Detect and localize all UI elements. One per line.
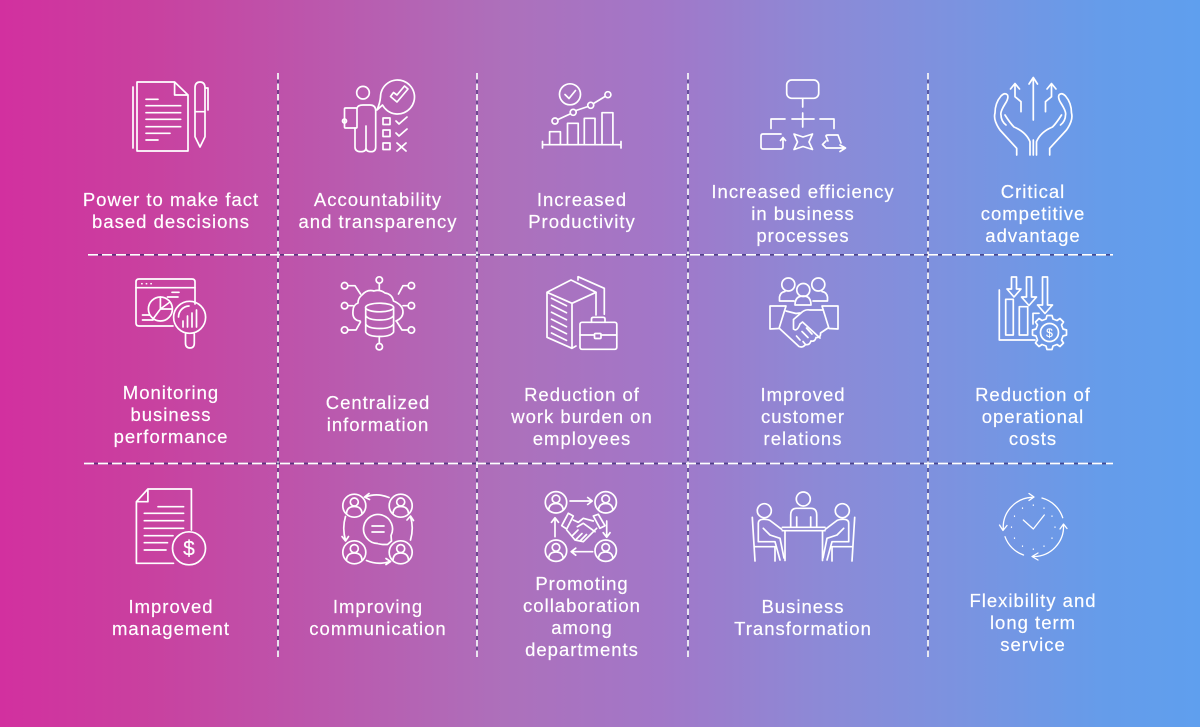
label: Increased efficiency	[711, 181, 895, 202]
label: departments	[525, 639, 639, 660]
label: Increased	[537, 189, 627, 210]
label: Improving	[333, 596, 423, 617]
panel: power to make fact based decisions	[83, 82, 259, 232]
label: Power to make fact	[83, 189, 259, 210]
panel: centralized information	[326, 277, 430, 435]
label: costs	[1009, 428, 1057, 449]
label: Productivity	[528, 211, 636, 232]
label: Centralized	[326, 392, 430, 413]
panel: business transformation	[734, 492, 872, 639]
label: communication	[309, 618, 447, 639]
label: relations	[764, 428, 842, 449]
icon: growth bar chart	[542, 84, 621, 148]
label: Flexibility and	[969, 590, 1097, 611]
label: based descisions	[92, 211, 250, 232]
panel: improved management	[112, 489, 230, 639]
label: processes	[756, 225, 850, 246]
label: work burden on	[510, 406, 653, 427]
panel: reduction of operational costs: $	[1046, 326, 1053, 340]
label: performance	[114, 426, 228, 447]
label: business	[130, 404, 212, 425]
label: and transparency	[299, 211, 457, 232]
panel: improved customer relations	[760, 278, 846, 449]
label: Reduction of	[524, 384, 640, 405]
panel: increased efficiency in business processes	[711, 80, 895, 246]
label: collaboration	[523, 595, 641, 616]
icon: process flow chart	[761, 80, 846, 152]
label: competitive	[981, 203, 1085, 224]
panel: monitoring business performance	[114, 279, 228, 447]
label: information	[327, 414, 429, 435]
label: Business	[761, 596, 845, 617]
panel: reduction of operational costs	[975, 277, 1091, 449]
icon: four people discussing	[342, 494, 414, 564]
label: customer	[761, 406, 845, 427]
icon: server stack and briefcase	[547, 277, 617, 349]
label: long term	[990, 612, 1076, 633]
icon: three people at a table	[752, 492, 855, 561]
label: operational	[982, 406, 1084, 427]
label: service	[1000, 634, 1066, 655]
icon: cloud database with nodes	[341, 277, 415, 350]
panel: flexibility and long term service	[969, 494, 1097, 655]
label: Accountability	[314, 189, 442, 210]
panel: improving communication	[309, 494, 447, 639]
label: Critical	[1001, 181, 1065, 202]
label: in business	[751, 203, 855, 224]
icon: falling costs chart and gear	[999, 277, 1066, 350]
icon: document and pen	[133, 82, 208, 151]
panel: reduction of work burden on employees	[510, 277, 653, 449]
label: among	[551, 617, 613, 638]
label: Transformation	[734, 618, 872, 639]
label: employees	[533, 428, 631, 449]
panel: increased productivity	[528, 84, 636, 232]
label: Improved	[128, 596, 214, 617]
panel: critical competitive advantage	[981, 78, 1085, 246]
label: Improved	[760, 384, 846, 405]
label: Reduction of	[975, 384, 1091, 405]
icon: dashboard with magnifier	[136, 279, 206, 348]
panel: promoting collaboration among departments	[523, 492, 641, 660]
icon: clock with circular arrows	[1000, 494, 1067, 560]
icon: person with checklist	[342, 80, 415, 152]
panel: accountability and transparency	[299, 80, 457, 232]
icon: people and handshake with arrows	[545, 492, 616, 561]
icon: people and handshake	[770, 278, 838, 347]
label: advantage	[985, 225, 1081, 246]
label: Promoting	[535, 573, 629, 594]
icon: hands with arrows	[995, 78, 1072, 155]
panel: improved management: $	[183, 538, 195, 560]
label: Monitoring	[123, 382, 219, 403]
icon: invoice with dollar coin	[136, 489, 206, 565]
label: management	[112, 618, 230, 639]
